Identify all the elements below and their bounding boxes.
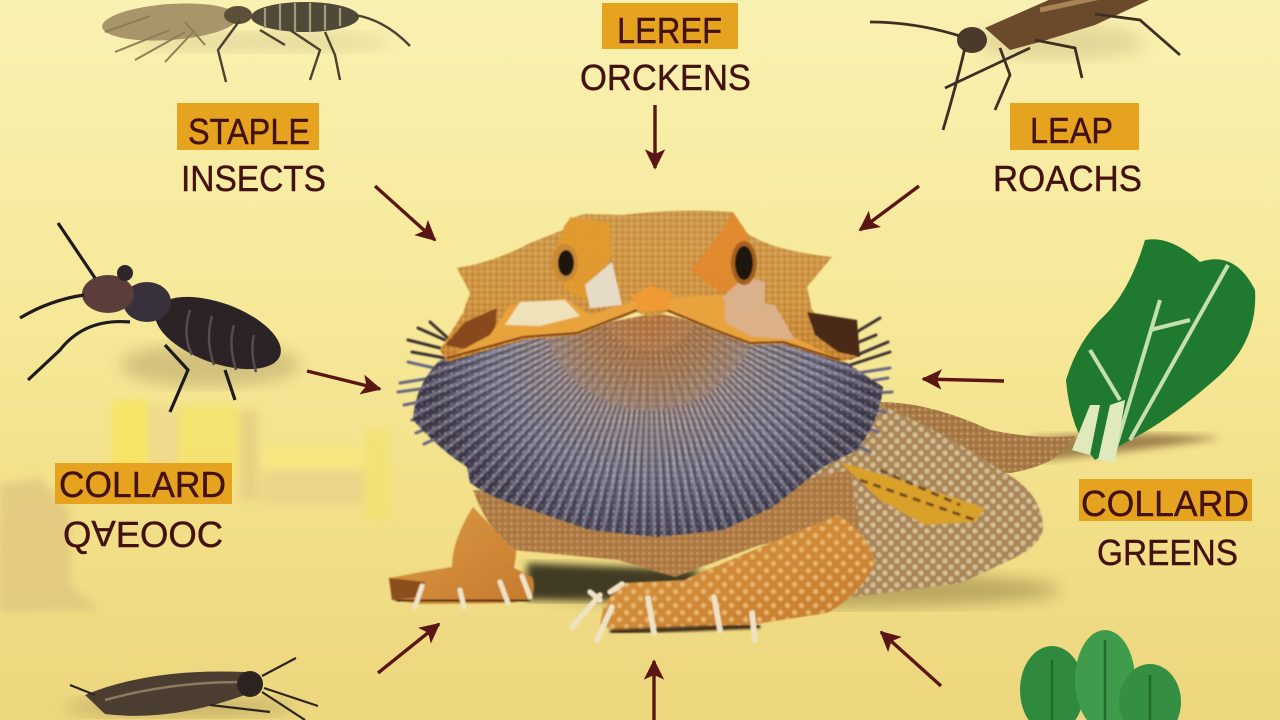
- tag: collard: COLLARD: [1081, 483, 1249, 524]
- label: leap roachs: [993, 103, 1142, 199]
- tag: leap: LEAP: [1030, 110, 1113, 151]
- text: greens: GREENS: [1097, 532, 1238, 573]
- arrow: bottom: [652, 661, 656, 720]
- label: collard qaeooc: [55, 463, 232, 555]
- text: insects: INSECTS: [181, 158, 326, 199]
- lizard body: [473, 405, 1043, 597]
- insect: bottom-left cockroach: [65, 658, 318, 720]
- leaf: collard green: [1066, 239, 1255, 462]
- beard ridges: [413, 316, 883, 538]
- label: leref orckens: [580, 3, 751, 98]
- insect: top-right roach: [870, 0, 1180, 130]
- lizard beard: [396, 314, 894, 538]
- arrow: right: [923, 379, 1004, 381]
- text: mirrored word: QAEOOC: [63, 513, 223, 555]
- insect: top-left staple insect: [101, 0, 410, 82]
- arrow: top right: [860, 186, 919, 230]
- arrow: top: [653, 105, 657, 168]
- icon: left eye: [552, 244, 578, 282]
- arrow: top left: [375, 186, 435, 240]
- tag: leap: [1010, 103, 1139, 151]
- beard spikes: [398, 318, 892, 452]
- arrow: bottom left: [378, 624, 439, 673]
- cheek openings: [807, 312, 860, 357]
- faded city silhouette: [0, 400, 390, 612]
- lizard left foreleg: [389, 507, 534, 607]
- text: orckens: ORCKENS: [580, 57, 751, 98]
- label: staple insects: [177, 103, 326, 199]
- lizard tail and shadow: [527, 402, 1222, 608]
- arrow: bottom right: [881, 632, 941, 686]
- lizard head: [440, 211, 860, 362]
- tag: collard: COLLARD: [59, 464, 226, 505]
- arrows: [307, 105, 1004, 720]
- arrow: left: [307, 371, 380, 389]
- leaf: bottom-right spinach: [1020, 630, 1181, 720]
- label: collard greens: [1079, 479, 1252, 573]
- lizard right foreleg: [572, 515, 875, 640]
- icon: right eye: [731, 241, 757, 285]
- tag: leref: LEREF: [617, 10, 722, 51]
- brow ridges: [552, 217, 612, 300]
- tag: staple: STAPLE: [188, 111, 310, 152]
- lips: [447, 290, 840, 360]
- text: roachs: ROACHS: [993, 158, 1142, 199]
- insect: left beetle: [20, 223, 300, 412]
